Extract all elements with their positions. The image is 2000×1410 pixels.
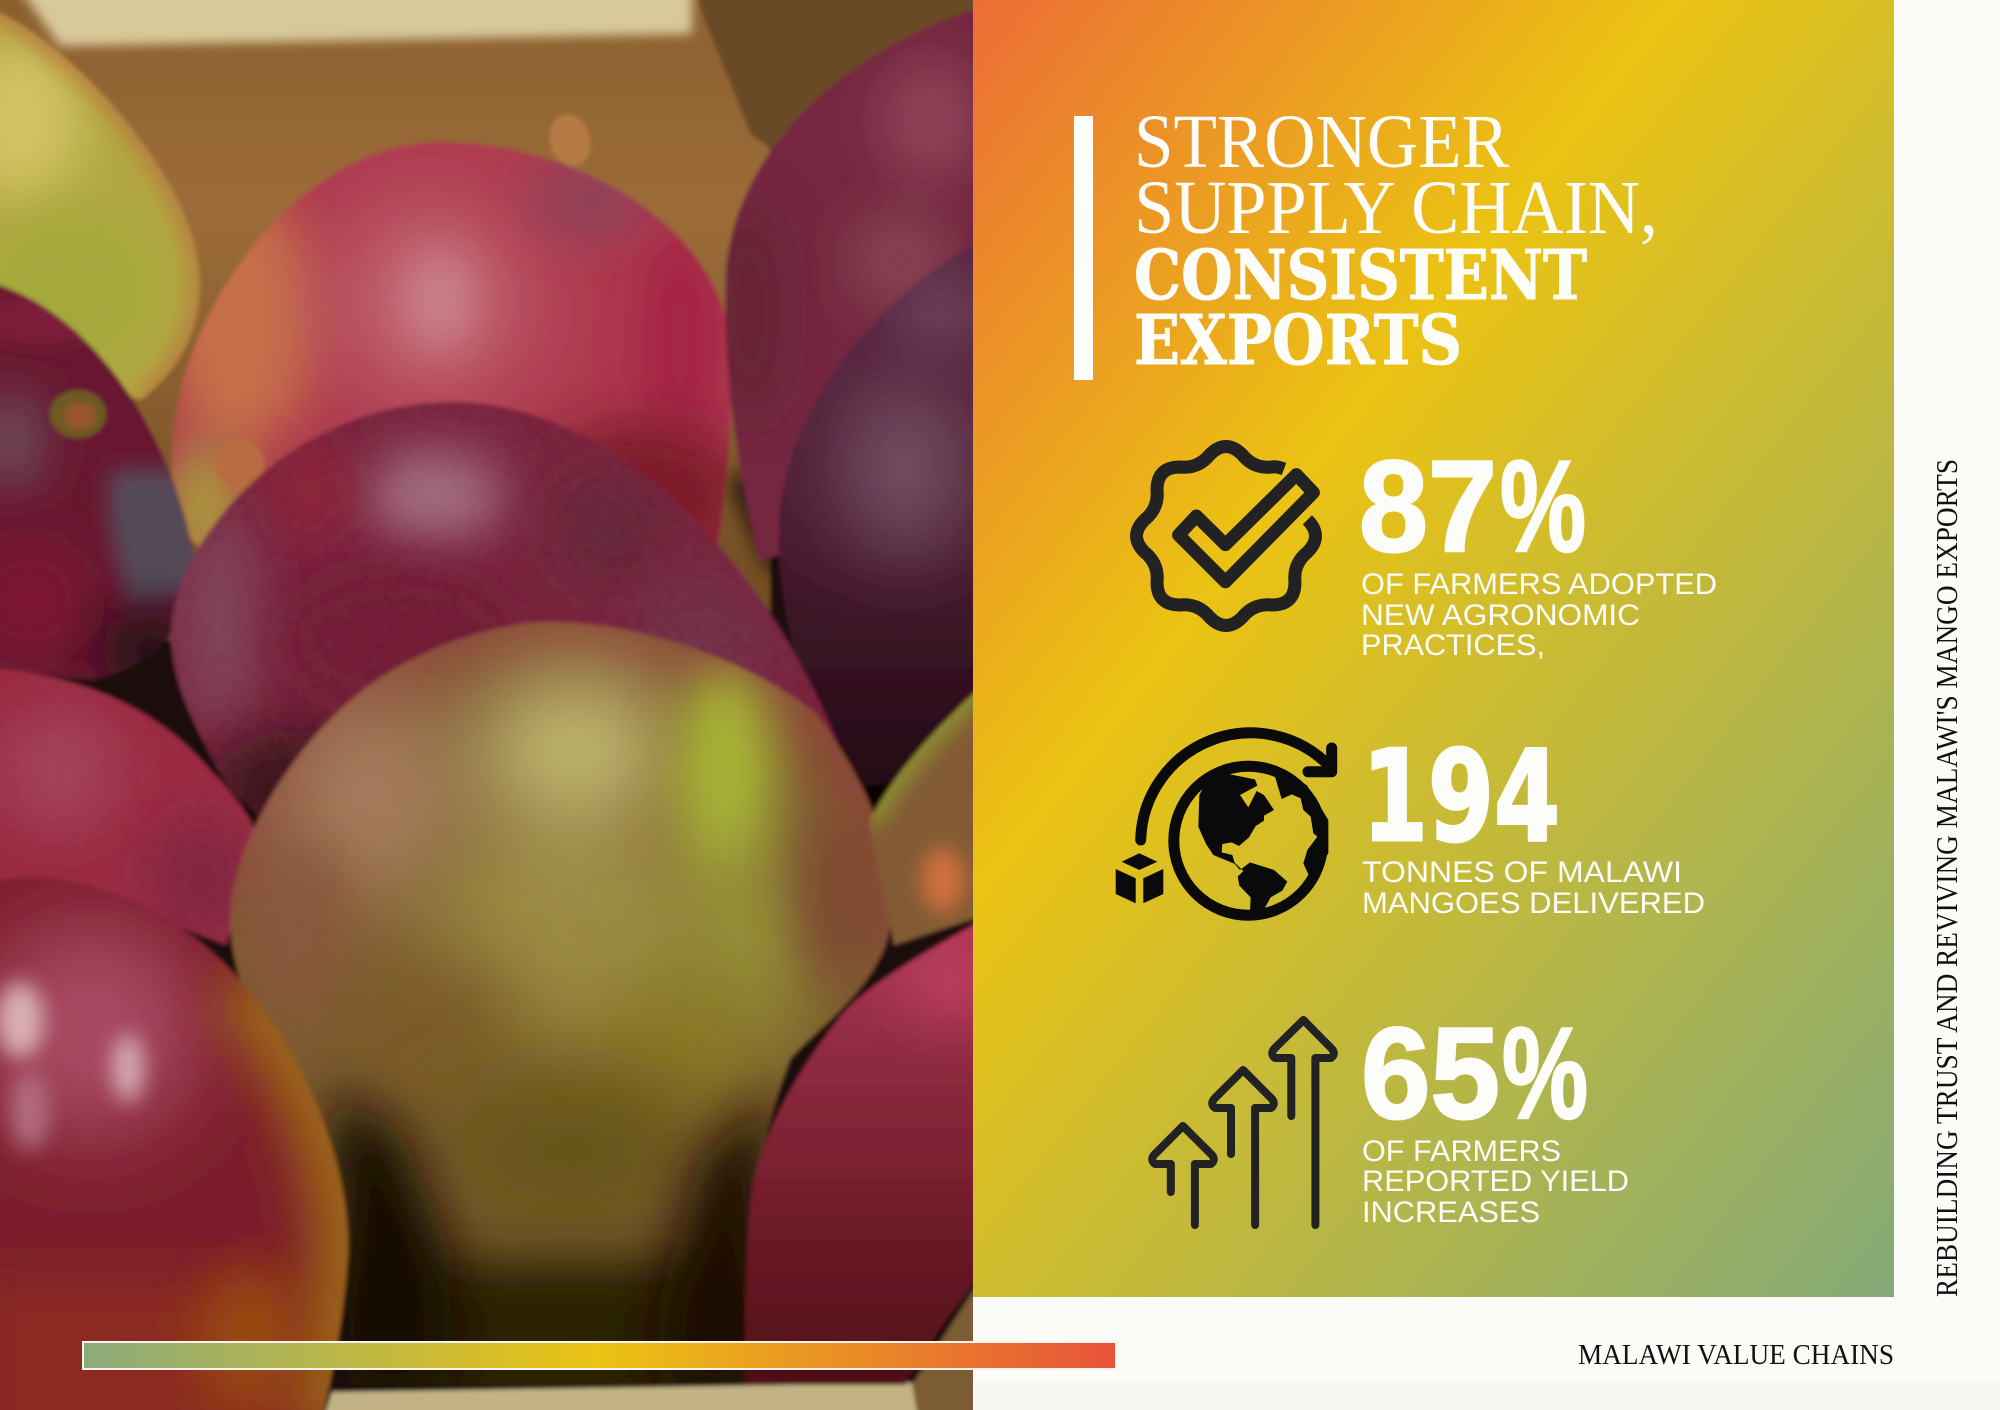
stat: 87 percent of farmers xyxy=(1359,433,1717,662)
stat: 65 percent of farmers: OF FARMERS xyxy=(1362,1135,1561,1168)
stat: 65 percent of farmers: INCREASES xyxy=(1362,1196,1540,1229)
mango: dark red with stem, left xyxy=(0,282,196,684)
mango: red with pink highlights, bottom left xyxy=(0,860,360,1410)
mango: dark red, top right xyxy=(722,8,973,562)
stat: 87 percent of farmers: PRACTICES, xyxy=(1361,629,1545,662)
mango: speckled purple-red, centre xyxy=(167,400,841,818)
panel: gradient statistics panel xyxy=(973,0,1894,1297)
photo: close-up of red and green mangoes in a cardboard box xyxy=(0,0,1010,1410)
stat: 194 tonnes delivered: 194 xyxy=(1362,723,1560,870)
stat: 65 percent of farmers xyxy=(1361,1000,1629,1229)
title: SUPPLY CHAIN, xyxy=(1134,166,1658,250)
title: CONSISTENT xyxy=(1134,236,1587,316)
title: EXPORTS xyxy=(1134,301,1462,381)
vertical side caption: REBUILDING TRUST AND REVIVING MALAWI'S MANGO EXPORTS xyxy=(1929,459,1964,1297)
stat: 194 tonnes delivered: MANGOES DELIVERED xyxy=(1362,887,1705,920)
mango stem, left xyxy=(50,390,106,438)
stat: 194 tonnes delivered: TONNES OF MALAWI xyxy=(1362,856,1682,889)
box corner, bottom right xyxy=(910,1284,973,1410)
mango stem, centre-left xyxy=(216,438,264,490)
stat: 87 percent of farmers: % xyxy=(1500,433,1586,579)
mango stem, top centre xyxy=(548,113,592,167)
accent bar beside title xyxy=(1074,116,1093,380)
stat: 194 tonnes delivered xyxy=(1362,723,1705,920)
icon: badge with check mark xyxy=(1136,446,1316,626)
mango: dark purple, right xyxy=(776,244,973,790)
mango: yellow-green, top left xyxy=(0,11,202,402)
title xyxy=(1134,100,1658,381)
gradient progress bar xyxy=(83,1342,1116,1369)
mango: green edge with orange stem, right xyxy=(868,688,973,948)
stat: 65 percent of farmers: REPORTED YIELD xyxy=(1362,1165,1629,1198)
mango: red with droplets, middle left xyxy=(0,667,256,948)
title: STRONGER xyxy=(1134,100,1509,184)
mango: big green and red, centre xyxy=(220,610,910,1410)
mango: red and orange, top centre xyxy=(170,140,734,548)
stat: 65 percent of farmers: % xyxy=(1502,1000,1588,1146)
stat: 87 percent of farmers: OF FARMERS ADOPTED xyxy=(1361,568,1717,601)
stat: 65 percent of farmers: 65 xyxy=(1361,1000,1500,1146)
icon: three rising arrows xyxy=(1152,1020,1334,1225)
icon: globe with delivery arrow and box xyxy=(1116,733,1332,915)
stat: 87 percent of farmers: 87 xyxy=(1359,433,1497,579)
footer label: MALAWI VALUE CHAINS xyxy=(1578,1340,1894,1371)
mango: red, bottom right xyxy=(742,921,973,1388)
stat: 87 percent of farmers: NEW AGRONOMIC xyxy=(1361,599,1640,632)
